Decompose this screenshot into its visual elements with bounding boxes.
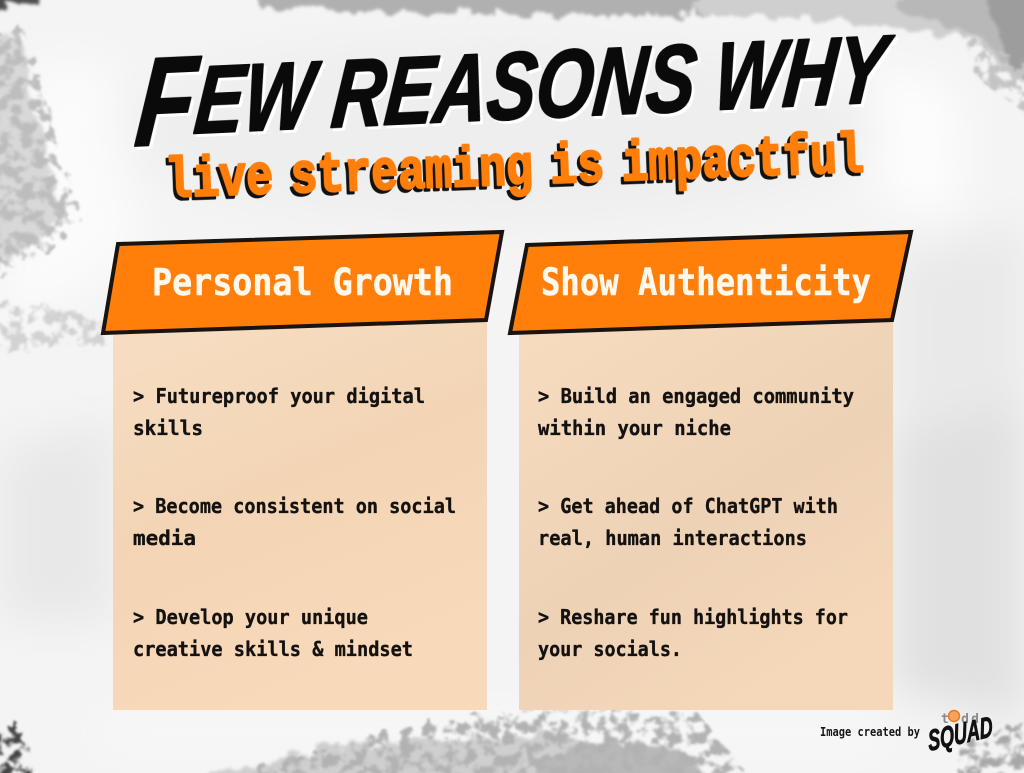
logo icon: orange circle [948,710,960,722]
logo: todd squad [927,710,994,758]
title: F [130,29,205,173]
text block: personal growth reasons [133,384,456,661]
heading: show authenticity: Show Authenticity [541,261,871,304]
text block: show authenticity reasons: > Build an engaged community [538,384,854,408]
text block: personal growth reasons: > Futureproof your digital [133,384,425,408]
text block: show authenticity reasons: your socials. [538,637,682,661]
text block: personal growth reasons: > Develop your unique [133,605,368,629]
heading: personal growth: Personal Growth [152,261,453,304]
logo word: todd: t dd [941,712,979,727]
banner: show authenticity [510,232,911,333]
text block: show authenticity reasons: real, human interactions [538,526,807,550]
text block: personal growth reasons: media [133,526,196,550]
text block: personal growth reasons: skills [133,416,203,440]
panel: personal growth [103,232,502,710]
text block: show authenticity reasons: > Get ahead of ChatGPT with [538,494,838,518]
text block: show authenticity reasons [538,384,854,661]
banner: personal growth [103,232,502,333]
text block: show authenticity reasons: within your niche [538,416,731,440]
credit: image created by: Image created by [820,725,920,739]
text block: personal growth reasons: creative skills & mindset [133,637,413,661]
panel: show authenticity [510,232,911,710]
panel background: show authenticity [519,320,893,710]
text block: show authenticity reasons: > Reshare fun highlights for [538,605,848,629]
text block: personal growth reasons: > Become consistent on social [133,494,456,518]
panel background: personal growth [113,320,487,710]
